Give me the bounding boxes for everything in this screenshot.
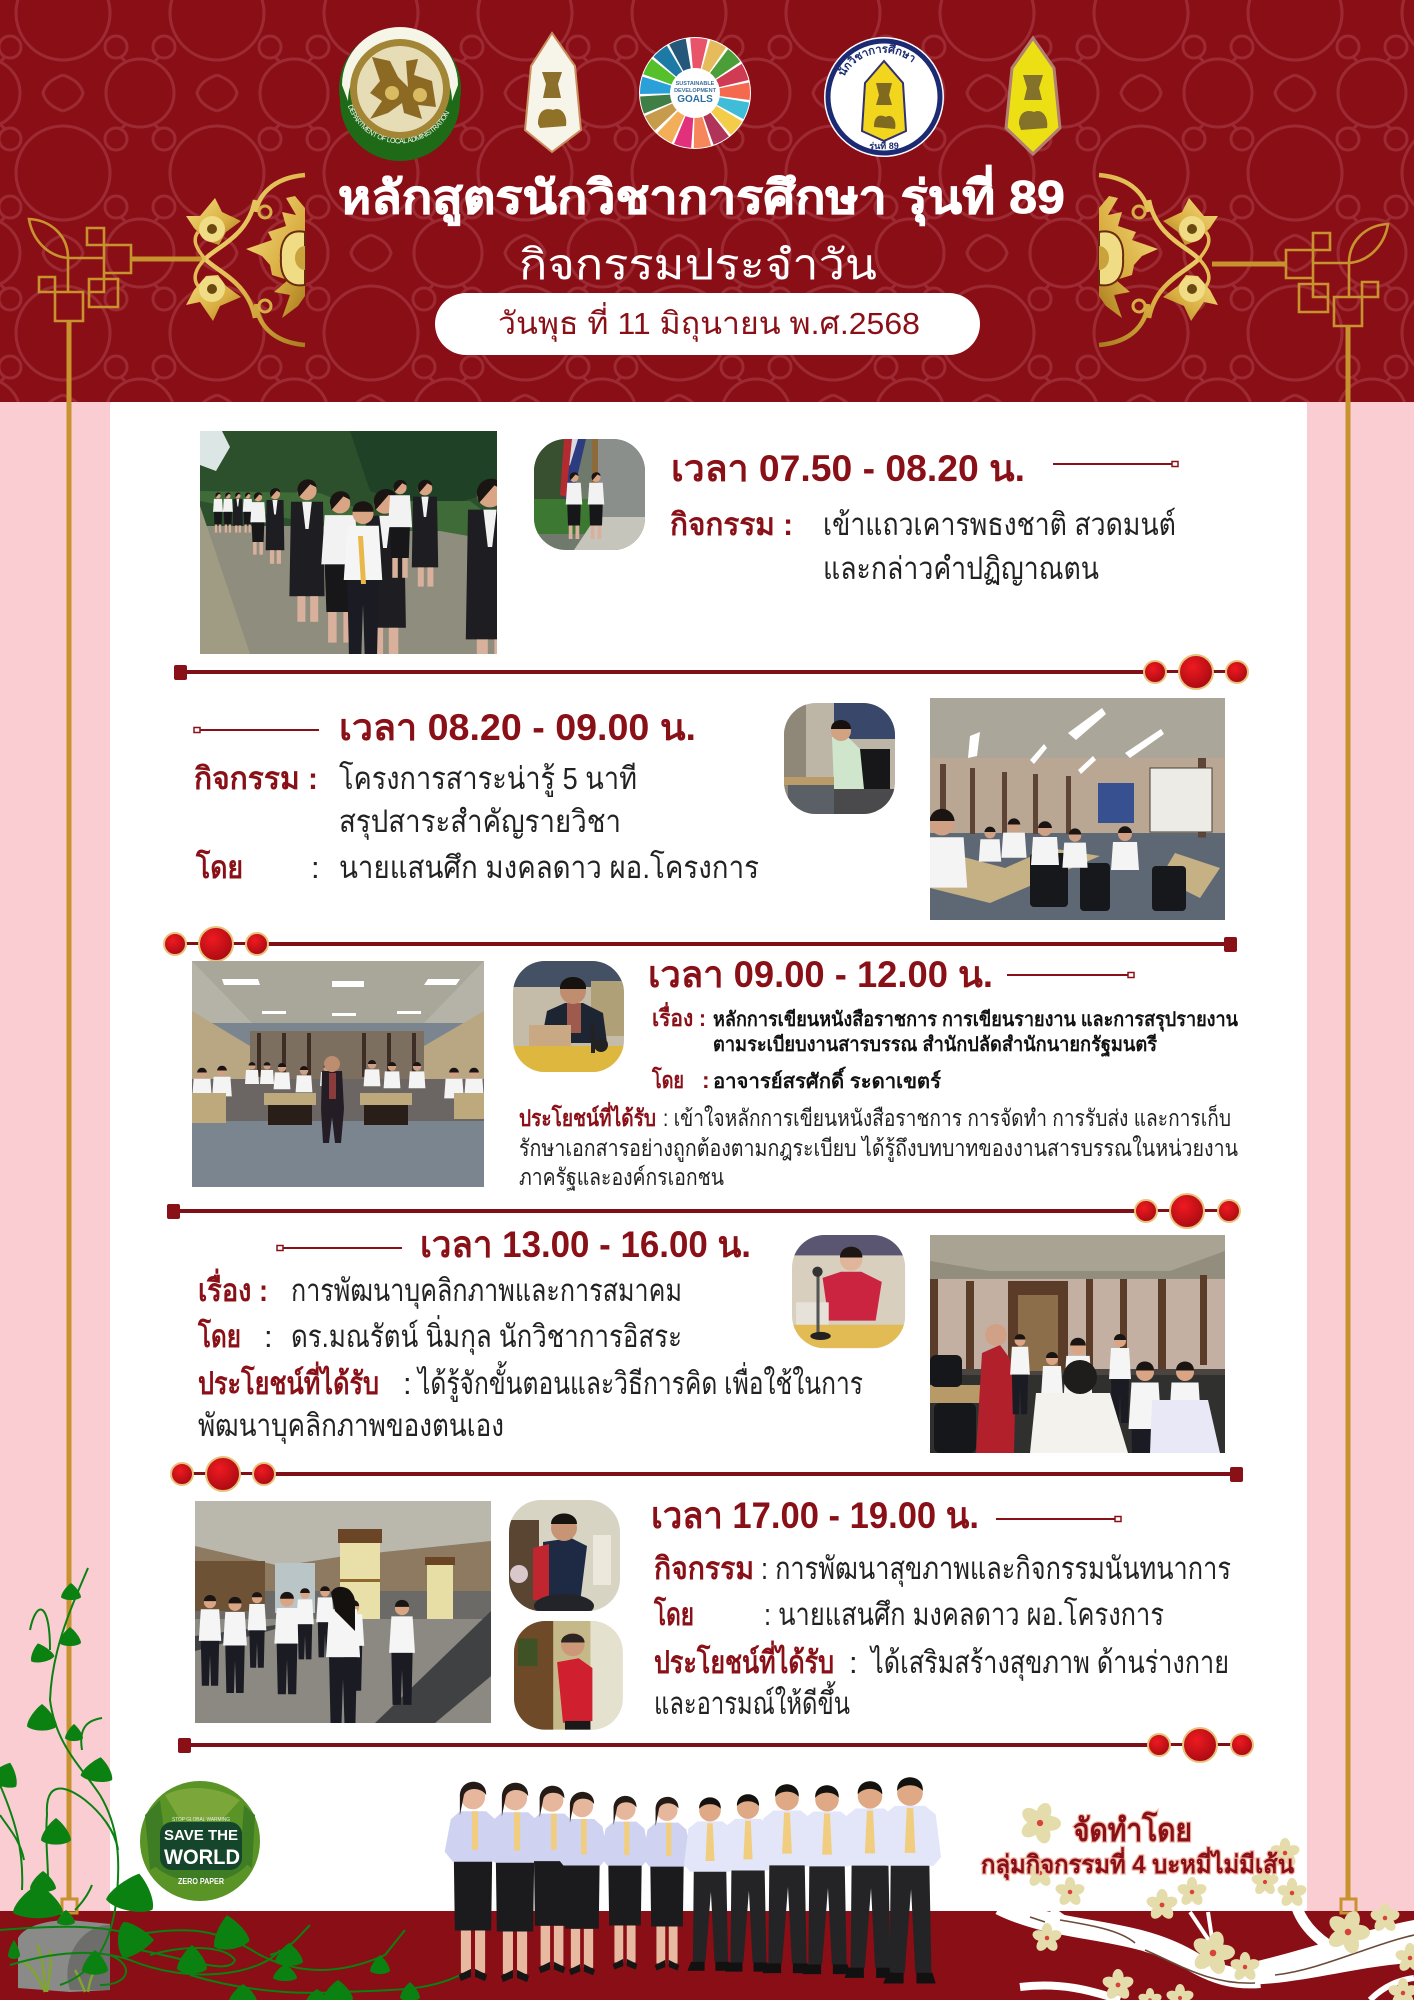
activity, speaker and benefits: ประโยชน์ที่ได้รับ xyxy=(654,1640,834,1680)
logo: Sustainable Development Goals wheel: DEVELOPMENT xyxy=(674,88,717,94)
topic, speaker and benefits: พัฒนาบุคลิกภาพของตนเอง xyxy=(198,1408,504,1445)
heading: time 17.00 - 19.00: เวลา 17.00 - 19.00 น. xyxy=(651,1495,979,1536)
logo: yellow shield emblem xyxy=(1006,38,1060,154)
team group photo xyxy=(445,1777,941,1983)
topic, speaker and benefits: การพัฒนาบุคลิกภาพและการสมาคม xyxy=(291,1273,682,1310)
logo: course 89 circular seal: นักวิชาการศึกษา xyxy=(838,44,915,76)
logo: white shield emblem xyxy=(525,33,581,152)
date pill xyxy=(435,293,980,355)
photo: lecturer with laptop xyxy=(513,961,624,1072)
panel: white content sheet xyxy=(110,392,1307,1922)
footer title: made by: กลุ่มกิจกรรมที่ 4 บะหมี่ไม่มีเส้น xyxy=(981,1847,1294,1881)
badge: save the world xyxy=(140,1781,260,1901)
ornament: right gold flourish xyxy=(1099,175,1218,345)
photo: group discussion xyxy=(930,1235,1225,1453)
ornament: left gold flourish xyxy=(186,175,305,345)
topic, speaker and benefits xyxy=(197,1268,863,1445)
topic and speaker: : xyxy=(702,1067,710,1093)
section 4: personality development xyxy=(198,1231,1225,1453)
topic, speaker and benefits: ประโยชน์ที่ได้รับ xyxy=(198,1361,379,1401)
divider 2 xyxy=(164,927,1237,961)
ornament: right gold lattice xyxy=(1212,224,1388,326)
benefits text: ประโยชน์ที่ได้รับ xyxy=(519,1101,656,1131)
heading: time 13.00 - 16.00: เวลา 13.00 - 16.00 น. xyxy=(420,1224,751,1265)
activity text: นายแสนศึก มงคลดาว ผอ.โครงการ xyxy=(339,850,759,885)
logo: Sustainable Development Goals wheel: GOALS xyxy=(677,94,713,105)
ornament: left gold lattice xyxy=(29,219,205,321)
heading rule xyxy=(1007,972,1134,978)
topic, speaker and benefits: โดย xyxy=(197,1318,241,1354)
topic, speaker and benefits: ได้รู้จักขั้นตอนและวิธีการคิด เพื่อใช้ในการ xyxy=(416,1361,863,1402)
divider 5 xyxy=(178,1728,1253,1762)
divider 4 xyxy=(171,1457,1243,1491)
activity text: โดย xyxy=(195,849,243,885)
activity text xyxy=(194,761,759,885)
activity, speaker and benefits: และอารมณ์ให้ดีขึ้น xyxy=(654,1681,850,1721)
badge: save the world: WORLD xyxy=(164,1846,240,1869)
date pill: วันพุธ ที่ 11 มิถุนายน พ.ศ.2568 xyxy=(498,302,920,343)
topic, speaker and benefits: เรื่อง : xyxy=(198,1268,268,1308)
subtitle: กิจกรรมประจำวัน xyxy=(519,241,877,288)
logo: course 89 circular seal xyxy=(824,37,944,157)
section 2: five-minute knowledge xyxy=(194,698,1225,920)
rock xyxy=(18,1920,110,1992)
section 1: morning assembly xyxy=(200,431,1178,675)
green vine xyxy=(0,1568,460,2000)
photo: speaker at podium xyxy=(784,703,895,814)
left gold pillar xyxy=(62,322,77,1913)
topic and speaker xyxy=(651,1001,1238,1093)
activity text: : xyxy=(311,850,320,885)
heading: time 07.50 - 08.20: เวลา 07.50 - 08.20 น. xyxy=(671,448,1025,489)
benefits text: รักษาเอกสารอย่างถูกต้องตามกฎระเบียบ ได้รู้ถึงบทบาทของงานสารบรรณในหน่วยงาน xyxy=(519,1135,1238,1162)
photo: group exercise in lobby xyxy=(195,1501,491,1723)
heading: time 08.20 - 09.00: เวลา 08.20 - 09.00 น. xyxy=(339,707,696,748)
header banner xyxy=(0,0,1414,402)
logo: course 89 circular seal: รุ่นที่ 89 xyxy=(869,139,899,152)
badge: save the world: ZERO PAPER xyxy=(178,1877,224,1886)
footer band xyxy=(0,1911,1414,2000)
photo: group in lecture hall xyxy=(192,961,484,1187)
activity, speaker and benefits: โดย xyxy=(653,1596,694,1632)
heading rule xyxy=(277,1246,402,1250)
title: หลักสูตรนักวิชาการศึกษา รุ่นที่ 89 xyxy=(338,165,1065,226)
topic, speaker and benefits: ดร.มณรัตน์ นิ่มกุล นักวิชาการอิสระ xyxy=(291,1315,682,1356)
topic and speaker: อาจารย์สรศักดิ์ ระดาเขตร์ xyxy=(713,1066,941,1093)
activity, speaker and benefits: ได้เสริมสร้างสุขภาพ ด้านร่างกาย xyxy=(869,1645,1229,1682)
logo: Department of Local Administration seal xyxy=(339,27,461,161)
section 5: health and recreation xyxy=(195,1495,1231,1730)
badge: save the world: STOP GLOBAL WARMING xyxy=(172,1817,230,1823)
activity text: กิจกรรม : xyxy=(194,761,318,796)
activity, speaker and benefits: : xyxy=(849,1645,858,1680)
photo: speaker with microphone xyxy=(509,1500,620,1618)
white blossom branches xyxy=(1000,1905,1414,2000)
benefits text xyxy=(519,1101,1238,1191)
topic and speaker: หลักการเขียนหนังสือราชการ การเขียนรายงาน และการสรุปรายงาน xyxy=(713,1008,1238,1032)
photo: flag raising xyxy=(534,439,645,550)
activity text: กิจกรรม : xyxy=(670,507,793,542)
topic and speaker: เรื่อง : xyxy=(652,1001,706,1031)
photo: lecturer in red blouse xyxy=(792,1235,905,1348)
heading rule xyxy=(1053,462,1178,466)
logo: Sustainable Development Goals wheel xyxy=(638,36,752,150)
activity, speaker and benefits xyxy=(653,1551,1231,1721)
right gold pillar xyxy=(1341,325,1356,1913)
photo: staff lined up outdoors xyxy=(200,431,497,654)
logo: Sustainable Development Goals wheel: SUSTAINABLE xyxy=(676,81,715,87)
activity, speaker and benefits: : การพัฒนาสุขภาพและกิจกรรมนันทนาการ xyxy=(761,1551,1231,1588)
logo: Department of Local Administration seal: DEPARTMENT OF LOCAL ADMINISTRATION xyxy=(348,104,450,144)
badge: save the world: SAVE THE xyxy=(164,1827,238,1844)
topic, speaker and benefits: : xyxy=(264,1319,273,1354)
activity text: และกล่าวคำปฏิญาณตน xyxy=(823,551,1099,586)
heading rule xyxy=(996,1516,1121,1522)
photo: meeting room with screen xyxy=(930,698,1225,920)
benefits text: ภาครัฐและองค์กรเอกชน xyxy=(519,1164,724,1191)
heading: time 09.00 - 12.00: เวลา 09.00 - 12.00 น. xyxy=(648,954,993,995)
activity text xyxy=(670,507,1176,586)
footer title: made by xyxy=(981,1796,1301,1896)
activity, speaker and benefits: : นายแสนศึก มงคลดาว ผอ.โครงการ xyxy=(764,1597,1164,1632)
benefits text: : เข้าใจหลักการเขียนหนังสือราชการ การจัดทำ การรับส่ง และการเก็บ xyxy=(663,1103,1231,1131)
topic and speaker: โดย xyxy=(651,1066,684,1093)
topic and speaker: ตามระเบียบงานสารบรรณ สำนักปลัดสำนักนายกรัฐมนตรี xyxy=(713,1033,1157,1058)
heading rule xyxy=(194,728,319,732)
section 3: official writing lecture xyxy=(192,954,1238,1191)
photo: man in red polo xyxy=(514,1621,623,1730)
divider 3 xyxy=(167,1194,1240,1228)
activity, speaker and benefits: กิจกรรม xyxy=(654,1551,754,1586)
topic, speaker and benefits: : xyxy=(403,1366,412,1401)
activity text: สรุปสาระสำคัญรายวิชา xyxy=(339,804,621,841)
activity text: เข้าแถวเคารพธงชาติ สวดมนต์ xyxy=(823,507,1176,542)
flower behind text xyxy=(1012,1796,1068,1851)
blossom flowers xyxy=(1031,1877,1414,2000)
activity text: โครงการสาระน่ารู้ 5 นาที xyxy=(339,761,637,797)
divider 1 xyxy=(174,655,1248,689)
footer title: made by: จัดทำโดย xyxy=(1073,1811,1192,1848)
